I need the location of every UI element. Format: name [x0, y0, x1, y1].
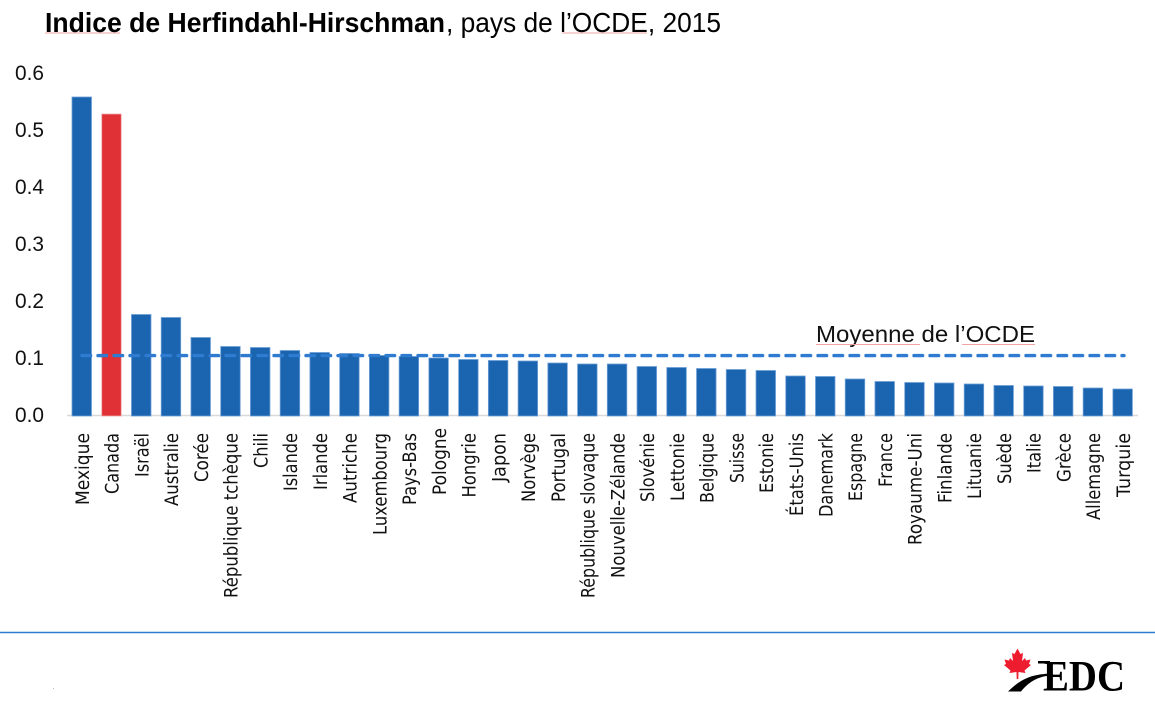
OECD average dashed line: [82, 354, 1124, 357]
country labels: Allemagne: [1084, 433, 1105, 520]
country labels: Danemark: [816, 433, 838, 517]
country labels: France: [876, 433, 897, 487]
country labels: Australie: [162, 433, 183, 506]
country labels: Italie: [1025, 433, 1046, 473]
country labels: Islande: [281, 433, 302, 491]
country labels: Norvège: [519, 433, 540, 502]
country labels: Suisse: [727, 433, 748, 483]
country labels: Finlande: [935, 433, 956, 503]
logo swoosh: [1008, 661, 1052, 692]
y axis labels: 0.6: [15, 62, 44, 85]
title: [45, 7, 721, 38]
icon: maple leaf: [1004, 648, 1031, 679]
country labels: Autriche: [341, 433, 362, 503]
country labels: Irlande: [311, 433, 332, 490]
country labels: Canada: [103, 433, 124, 494]
y axis labels: 0.4: [15, 176, 44, 199]
y axis labels: 0.3: [15, 233, 44, 256]
y axis labels: [15, 62, 44, 427]
y axis labels: 0.2: [15, 290, 44, 313]
country labels: Espagne: [846, 433, 867, 501]
OECD average label: Moyenne de l’OCDE: [816, 321, 1035, 347]
y axis labels: 0.5: [15, 119, 44, 142]
logo wordmark: EDC: [1043, 654, 1125, 700]
country labels: Portugal: [549, 433, 570, 502]
country labels: Lituanie: [965, 433, 986, 499]
country labels: [73, 428, 1135, 598]
country labels: Chili: [251, 433, 272, 468]
country labels: Turquie: [1114, 433, 1135, 498]
country labels: Belgique: [698, 433, 719, 503]
country labels: Suède: [995, 433, 1016, 484]
country labels: Slovénie: [638, 433, 659, 502]
country labels: États-Unis: [786, 433, 808, 516]
country labels: Corée: [192, 433, 213, 482]
bars: [72, 97, 1132, 416]
bar chart: [67, 97, 1138, 598]
country labels: Luxembourg: [370, 433, 391, 535]
y axis labels: 0.1: [15, 347, 44, 370]
country labels: République slovaque: [579, 433, 600, 598]
country labels: Nouvelle-Zélande: [608, 433, 629, 578]
country labels: Mexique: [73, 433, 94, 505]
title: Indice de Herfindahl-Hirschman: [45, 7, 445, 38]
country labels: Lettonie: [668, 433, 689, 501]
country labels: Pays-Bas: [400, 433, 421, 505]
country labels: Japon: [489, 433, 510, 483]
country labels: Grèce: [1054, 433, 1075, 482]
country labels: République tchèque: [222, 433, 243, 598]
country labels: Pologne: [430, 428, 451, 495]
country labels: Royaume-Uni: [906, 433, 927, 545]
country labels: Estonie: [757, 433, 778, 493]
title: , pays de l’OCDE, 2015: [446, 7, 721, 38]
EDC logo: [1004, 648, 1125, 700]
country labels: Israël: [132, 433, 153, 477]
y axis labels: 0.0: [15, 404, 44, 427]
country labels: Hongrie: [460, 433, 481, 498]
